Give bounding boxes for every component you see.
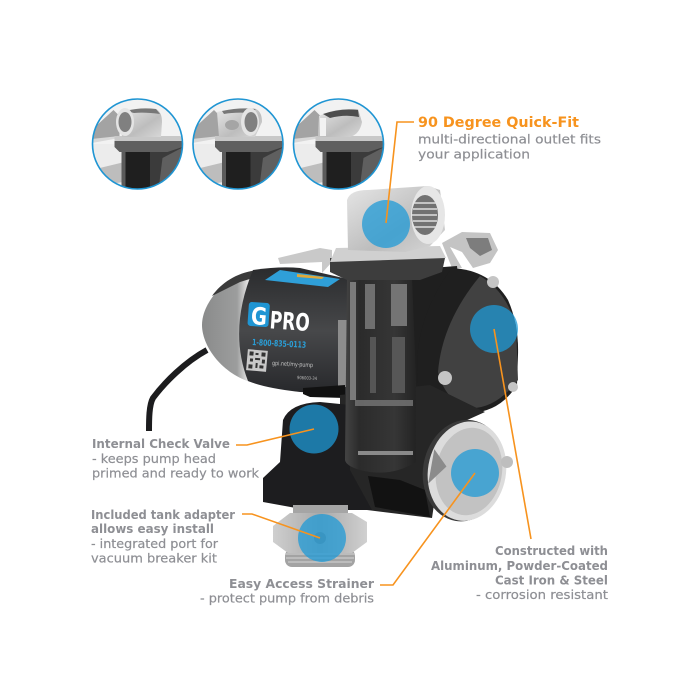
vertical column [345, 278, 416, 473]
detail circle: outlet position 2 [192, 98, 284, 190]
silver carry handle [442, 232, 498, 268]
check valve and base [263, 402, 372, 510]
threaded outlet [411, 186, 445, 244]
motor side strip [338, 320, 350, 387]
callout: tank adapter: allows easy install [91, 521, 214, 536]
callout: 90 degree quick-fit: your application [418, 146, 530, 162]
callout: construction: Constructed with [495, 543, 608, 558]
callout: tank adapter [91, 507, 236, 566]
GPRO logo: G [250, 302, 268, 331]
quick-fit outlet elbow [347, 186, 445, 252]
callout: internal check valve: - keeps pump head [92, 451, 216, 466]
detail circle: outlet position 1 [92, 98, 184, 190]
callout: 90 degree quick-fit: multi-directional outlet fits [418, 132, 601, 146]
callout: easy access strainer: - protect pump from debris [200, 590, 374, 606]
callout: internal check valve: Internal Check Valve [92, 436, 230, 451]
detail circle: outlet position 3 [292, 98, 384, 190]
callout: tank adapter: - integrated port for [91, 536, 219, 551]
callout: internal check valve: primed and ready to work [92, 466, 260, 480]
GPRO logo [247, 302, 311, 337]
strainer disc [415, 413, 514, 528]
cast iron side cover [417, 268, 518, 413]
motor body [239, 267, 352, 395]
callout: 90 degree quick-fit: 90 Degree Quick-Fit [418, 115, 579, 131]
callout: construction: Aluminum, Powder-Coated [431, 558, 608, 573]
leader line: quick-fit [386, 122, 414, 223]
web address: gpi.net/my-pump [272, 360, 313, 369]
pump illustration [149, 186, 518, 567]
callout: 90 degree quick-fit [418, 115, 601, 162]
flange [330, 258, 445, 280]
phone number: 1-800-835-0113 [252, 338, 306, 351]
motor label [265, 270, 340, 287]
silver carry bracket [278, 248, 332, 273]
callout: easy access strainer [200, 576, 375, 606]
QR code [246, 349, 268, 372]
leader line: strainer [380, 473, 475, 585]
leader line: construction [494, 329, 531, 539]
housing behind cover [405, 266, 470, 400]
callout: easy access strainer: Easy Access Strainer [229, 576, 375, 591]
leader line: tank adapter [242, 514, 320, 538]
GPRO logo: PRO [269, 306, 311, 337]
callout: internal check valve [92, 436, 260, 480]
lower housing [340, 385, 485, 518]
callout: tank adapter: Included tank adapter [91, 507, 236, 522]
callout spots [290, 200, 518, 562]
motor mount band [303, 385, 345, 398]
leader line: check valve [236, 429, 314, 445]
callout: tank adapter: vacuum breaker kit [91, 550, 217, 566]
callout: construction: Cast Iron & Steel [495, 573, 608, 588]
motor end cap [202, 270, 272, 382]
power cable [149, 350, 207, 431]
tank adapter [273, 505, 367, 567]
callout: construction [431, 543, 608, 602]
part number: 906003-34 [297, 375, 317, 382]
callout: construction: - corrosion resistant [476, 587, 608, 602]
